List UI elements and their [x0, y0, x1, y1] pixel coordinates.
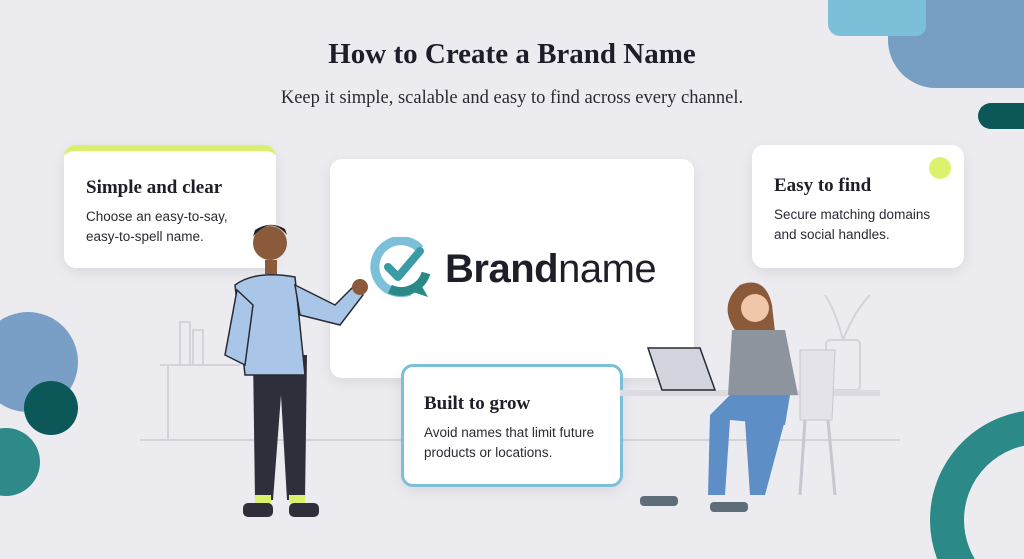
center card: logo — [330, 159, 694, 378]
woman at desk illustration — [620, 282, 880, 512]
card: Easy to find: Easy to find — [774, 175, 871, 196]
man illustration — [224, 224, 368, 517]
card: Built to grow: Avoid names that limit future products or locations. — [424, 425, 594, 460]
card: Easy to find: Secure matching domains and social handles. — [774, 207, 930, 242]
decorative ring bottom right — [930, 411, 1024, 559]
decorative shape: steel blue block — [888, 0, 1024, 88]
card: Simple and clear: Simple and clear — [86, 177, 222, 198]
subtitle: Keep it simple, scalable and easy to find across every channel. — [281, 88, 743, 108]
card: Easy to find — [752, 145, 964, 268]
decorative shape: dark teal pill — [978, 103, 1024, 129]
title: How to Create a Brand Name — [328, 38, 696, 70]
card: Simple and clear — [64, 145, 276, 268]
icon: logo check bubble — [370, 237, 430, 298]
decorative shape: light blue block — [828, 0, 926, 36]
decorative circles left — [0, 312, 78, 412]
card: Built to grow — [401, 364, 623, 487]
card: Built to grow: Built to grow — [424, 393, 530, 414]
icon: lime dot — [929, 157, 951, 179]
card: Simple and clear: Choose an easy-to-say, easy-to-spell name. — [86, 209, 228, 244]
logo wordmark: Brandname — [445, 247, 656, 291]
